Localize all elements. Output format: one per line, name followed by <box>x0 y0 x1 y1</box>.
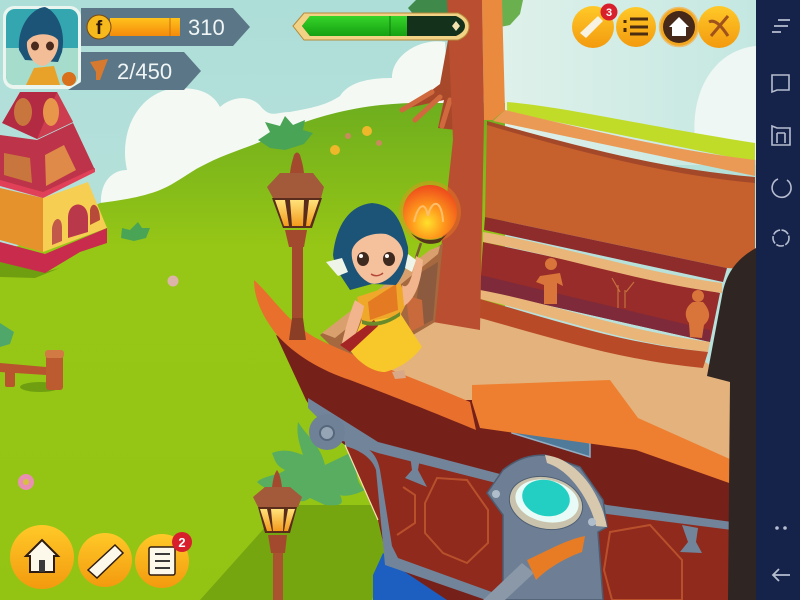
wooden fence <box>0 350 64 392</box>
coin resource bar: 310 <box>188 15 225 40</box>
hair flowers <box>326 254 416 276</box>
bottom left buttons <box>10 525 192 589</box>
sky behind ship <box>500 0 756 165</box>
button: scroll <box>78 533 132 587</box>
rail icon: rotate <box>772 179 791 197</box>
side navigation rail <box>756 0 800 600</box>
rail icon: back arrow <box>773 569 790 581</box>
blue base under hull <box>373 553 460 600</box>
tower middle tier <box>0 123 95 198</box>
ship window frame column <box>482 0 505 120</box>
coin resource bar <box>81 8 250 46</box>
tower base <box>0 188 43 252</box>
ground shadow beside ship <box>200 505 386 600</box>
rail icon: menu <box>772 20 790 32</box>
button: home active <box>660 8 698 46</box>
button: list <box>616 7 656 47</box>
tower top tier <box>2 92 73 139</box>
button: notes with badge <box>135 532 192 588</box>
wall figure left <box>536 258 563 304</box>
far lamp post <box>267 152 324 340</box>
trophy resource bar: 2/450 <box>117 59 172 84</box>
health bar <box>293 13 469 40</box>
arms and sash <box>342 300 364 346</box>
player portrait card <box>3 6 81 89</box>
rail icon: settings <box>773 230 789 246</box>
wall figure right <box>686 290 709 338</box>
trophy resource bar <box>68 52 201 90</box>
clouds <box>101 41 756 204</box>
tower ground shadow <box>0 260 60 278</box>
staff and orb <box>399 181 461 258</box>
ship deck <box>340 300 735 460</box>
rail icon: calendar <box>772 126 790 145</box>
machine eye <box>483 455 607 600</box>
ship bow rim <box>254 280 476 430</box>
skirt <box>350 313 422 372</box>
near lamp post <box>253 470 302 600</box>
hair <box>333 203 408 290</box>
bushes and flowers <box>0 116 382 490</box>
button: tool with badge: 3 <box>606 7 612 19</box>
tree trunk and roots <box>402 40 456 130</box>
grass strip behind ship <box>507 102 755 162</box>
dark tower at right <box>707 248 756 600</box>
raised deck piece <box>472 380 732 484</box>
ship cabin wall <box>480 110 755 368</box>
button: tool with badge <box>572 4 618 48</box>
character with fire orb <box>326 181 461 379</box>
button: house <box>10 525 74 589</box>
top right buttons <box>572 4 740 48</box>
button: notes with badge: 2 <box>178 535 186 550</box>
face <box>352 234 403 284</box>
red tiered tower <box>0 92 107 273</box>
ship hull <box>276 335 732 600</box>
coin resource bar: f <box>96 18 103 39</box>
grassy hill <box>0 103 505 600</box>
platform wall behind character <box>320 243 443 360</box>
ship mast <box>433 0 484 330</box>
button: tools <box>698 6 740 48</box>
rail icon: dots <box>775 526 787 530</box>
large leaves <box>257 422 365 505</box>
rail icon: message <box>772 75 789 92</box>
distant tree <box>408 0 523 27</box>
